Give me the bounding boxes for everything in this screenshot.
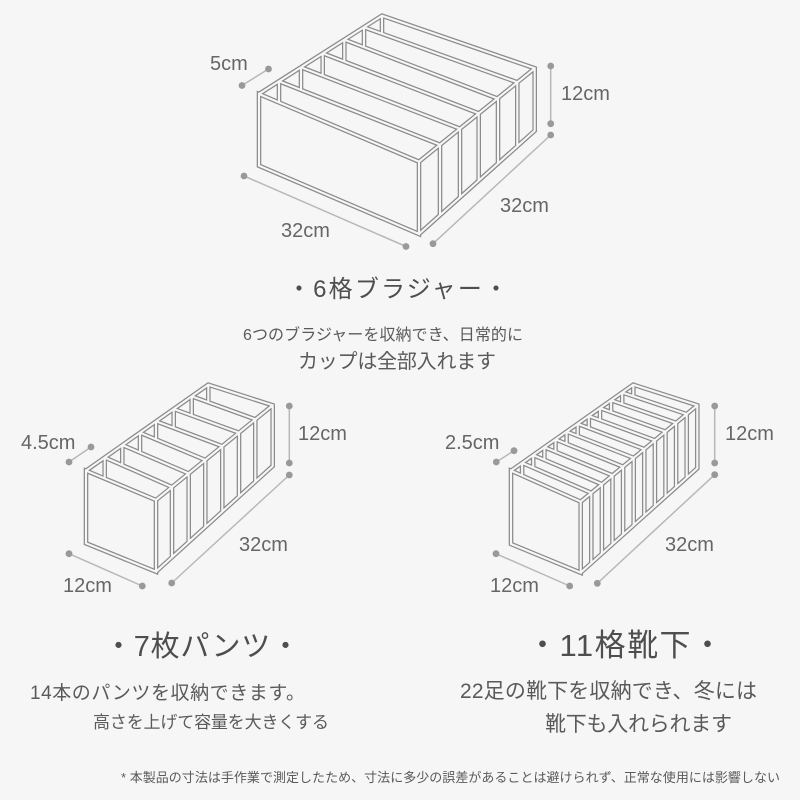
- dimension: width 12cm: [63, 550, 146, 597]
- dimension: width 12cm: [490, 550, 573, 597]
- text: description line 1: 14本のパンツを収納できます。: [30, 682, 305, 704]
- icon: 6-compartment box drawing: [259, 16, 535, 234]
- dimension: width 12cm: 12cm: [490, 575, 539, 597]
- dimension: compartment width 4.5cm: [21, 432, 94, 465]
- dimension: depth 32cm: [168, 472, 293, 586]
- dimension: height 12cm: [547, 63, 610, 127]
- dimension: depth 32cm: 32cm: [500, 195, 549, 217]
- dimension: compartment width 5cm: [210, 53, 272, 89]
- dimension: depth 32cm: 32cm: [665, 534, 714, 556]
- icon: 7-compartment box drawing: [86, 385, 273, 572]
- panel: 6-compartment organizer: [210, 16, 610, 373]
- dimension: height 12cm: 12cm: [561, 83, 610, 105]
- panel: 11-compartment organizer: [445, 385, 774, 736]
- dimension: compartment width 4.5cm: 4.5cm: [21, 432, 75, 454]
- heading: 11-compartment socks: ・11格靴下・: [527, 628, 723, 663]
- dimension: compartment width 2.5cm: [445, 432, 517, 465]
- dimension: height 12cm: [711, 403, 774, 466]
- footnote: * 本製品の寸法は手作業で測定したため、寸法に多少の誤差があることは避けられず、正常な使用には影響しない: [121, 770, 780, 785]
- dimension: depth 32cm: 32cm: [239, 534, 288, 556]
- dimension: height 12cm: [286, 403, 347, 466]
- text: description line 2: 高さを上げて容量を大きくする: [93, 713, 329, 732]
- dimension: depth 32cm: [430, 132, 554, 247]
- heading: 7 pants: ・7枚パンツ・: [104, 630, 300, 663]
- dimension: depth 32cm: [594, 471, 718, 587]
- dimension: width 32cm: [241, 173, 409, 250]
- dimension: compartment width 2.5cm: 2.5cm: [445, 432, 499, 454]
- text: description line 1: 22足の靴下を収納でき、冬には: [460, 680, 757, 703]
- text: description line 1: 6つのブラジャーを収納でき、日常的に: [243, 325, 523, 344]
- dimension: compartment width 5cm: 5cm: [210, 53, 248, 75]
- dimension: height 12cm: 12cm: [298, 423, 347, 445]
- dimension: width 12cm: 12cm: [63, 575, 112, 597]
- text: description line 2: 靴下も入れられます: [545, 713, 732, 736]
- heading: 6-compartment bra: ・6格ブラジャー・: [287, 276, 508, 303]
- panel: 7-compartment organizer: [21, 385, 347, 732]
- text: description line 2: カップは全部入れます: [298, 350, 496, 373]
- dimension: height 12cm: 12cm: [725, 423, 774, 445]
- dimension: width 32cm: 32cm: [281, 220, 330, 242]
- icon: 11-compartment box drawing: [511, 385, 697, 573]
